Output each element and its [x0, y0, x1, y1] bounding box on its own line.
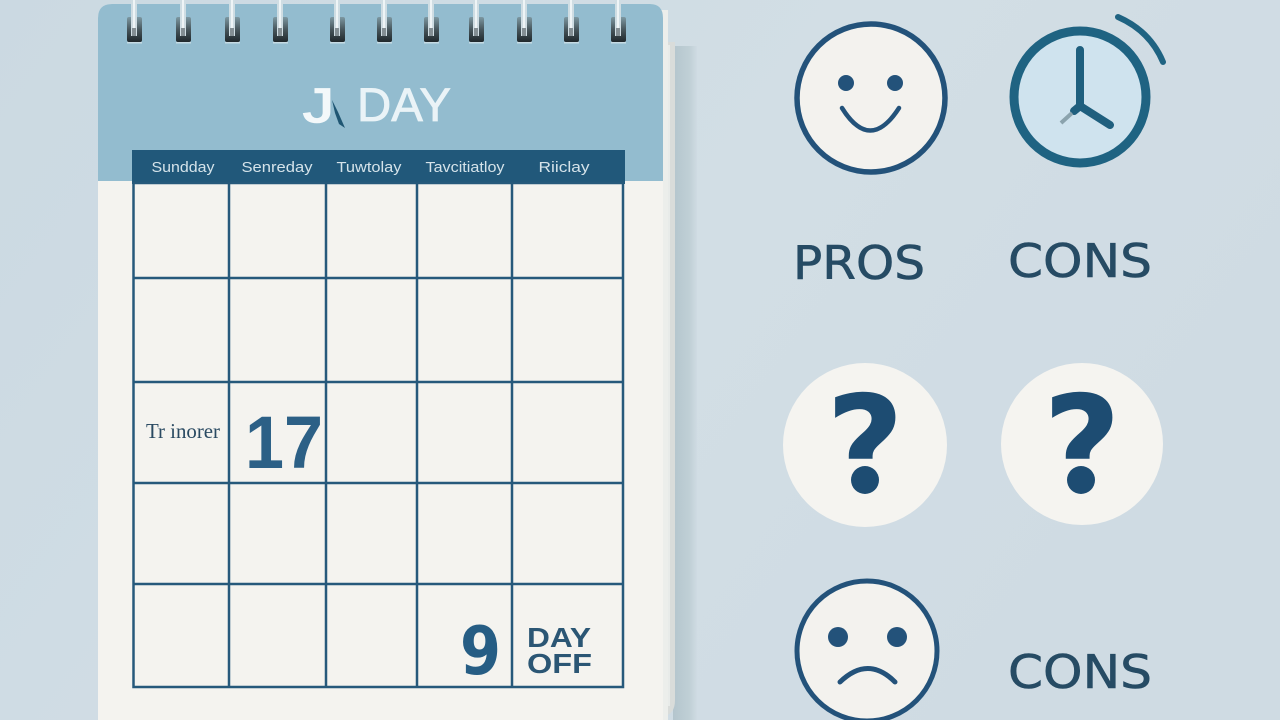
calendar title: DAY [357, 78, 451, 131]
weekday header: Tuwtolay [336, 159, 402, 176]
weekday header: Sundday [152, 159, 215, 176]
weekday header [132, 150, 625, 184]
calendar [98, 0, 697, 720]
page [98, 4, 663, 720]
cons label lower: CONS [1008, 645, 1152, 699]
icon: clock [1014, 17, 1163, 163]
calendar grid [133, 183, 623, 687]
back pages [660, 10, 697, 720]
icon: question mark left [783, 363, 947, 527]
weekday header: Tavcitiatloy [426, 159, 505, 176]
blue header band [98, 4, 663, 181]
day off label [527, 622, 592, 679]
cell label: Tr inorer [146, 419, 220, 443]
day off label: DAY [527, 622, 591, 653]
icon: sad face [797, 581, 937, 720]
day off label: OFF [527, 648, 592, 679]
weekday header: Senreday [242, 159, 313, 176]
icon: question mark right: ? [1043, 367, 1121, 524]
cons label: CONS [1008, 234, 1152, 288]
icon: question mark right [1001, 363, 1163, 525]
icon: question mark left: ? [826, 367, 904, 524]
date 9: 9 [460, 612, 501, 690]
icon: smiley face [797, 24, 945, 172]
calendar title [303, 78, 451, 133]
spiral rings [127, 0, 626, 44]
calendar title: J [303, 80, 334, 133]
pros label: PROS [793, 236, 925, 290]
date 17: 17 [245, 401, 323, 484]
weekday header: Riiclay [538, 159, 590, 176]
